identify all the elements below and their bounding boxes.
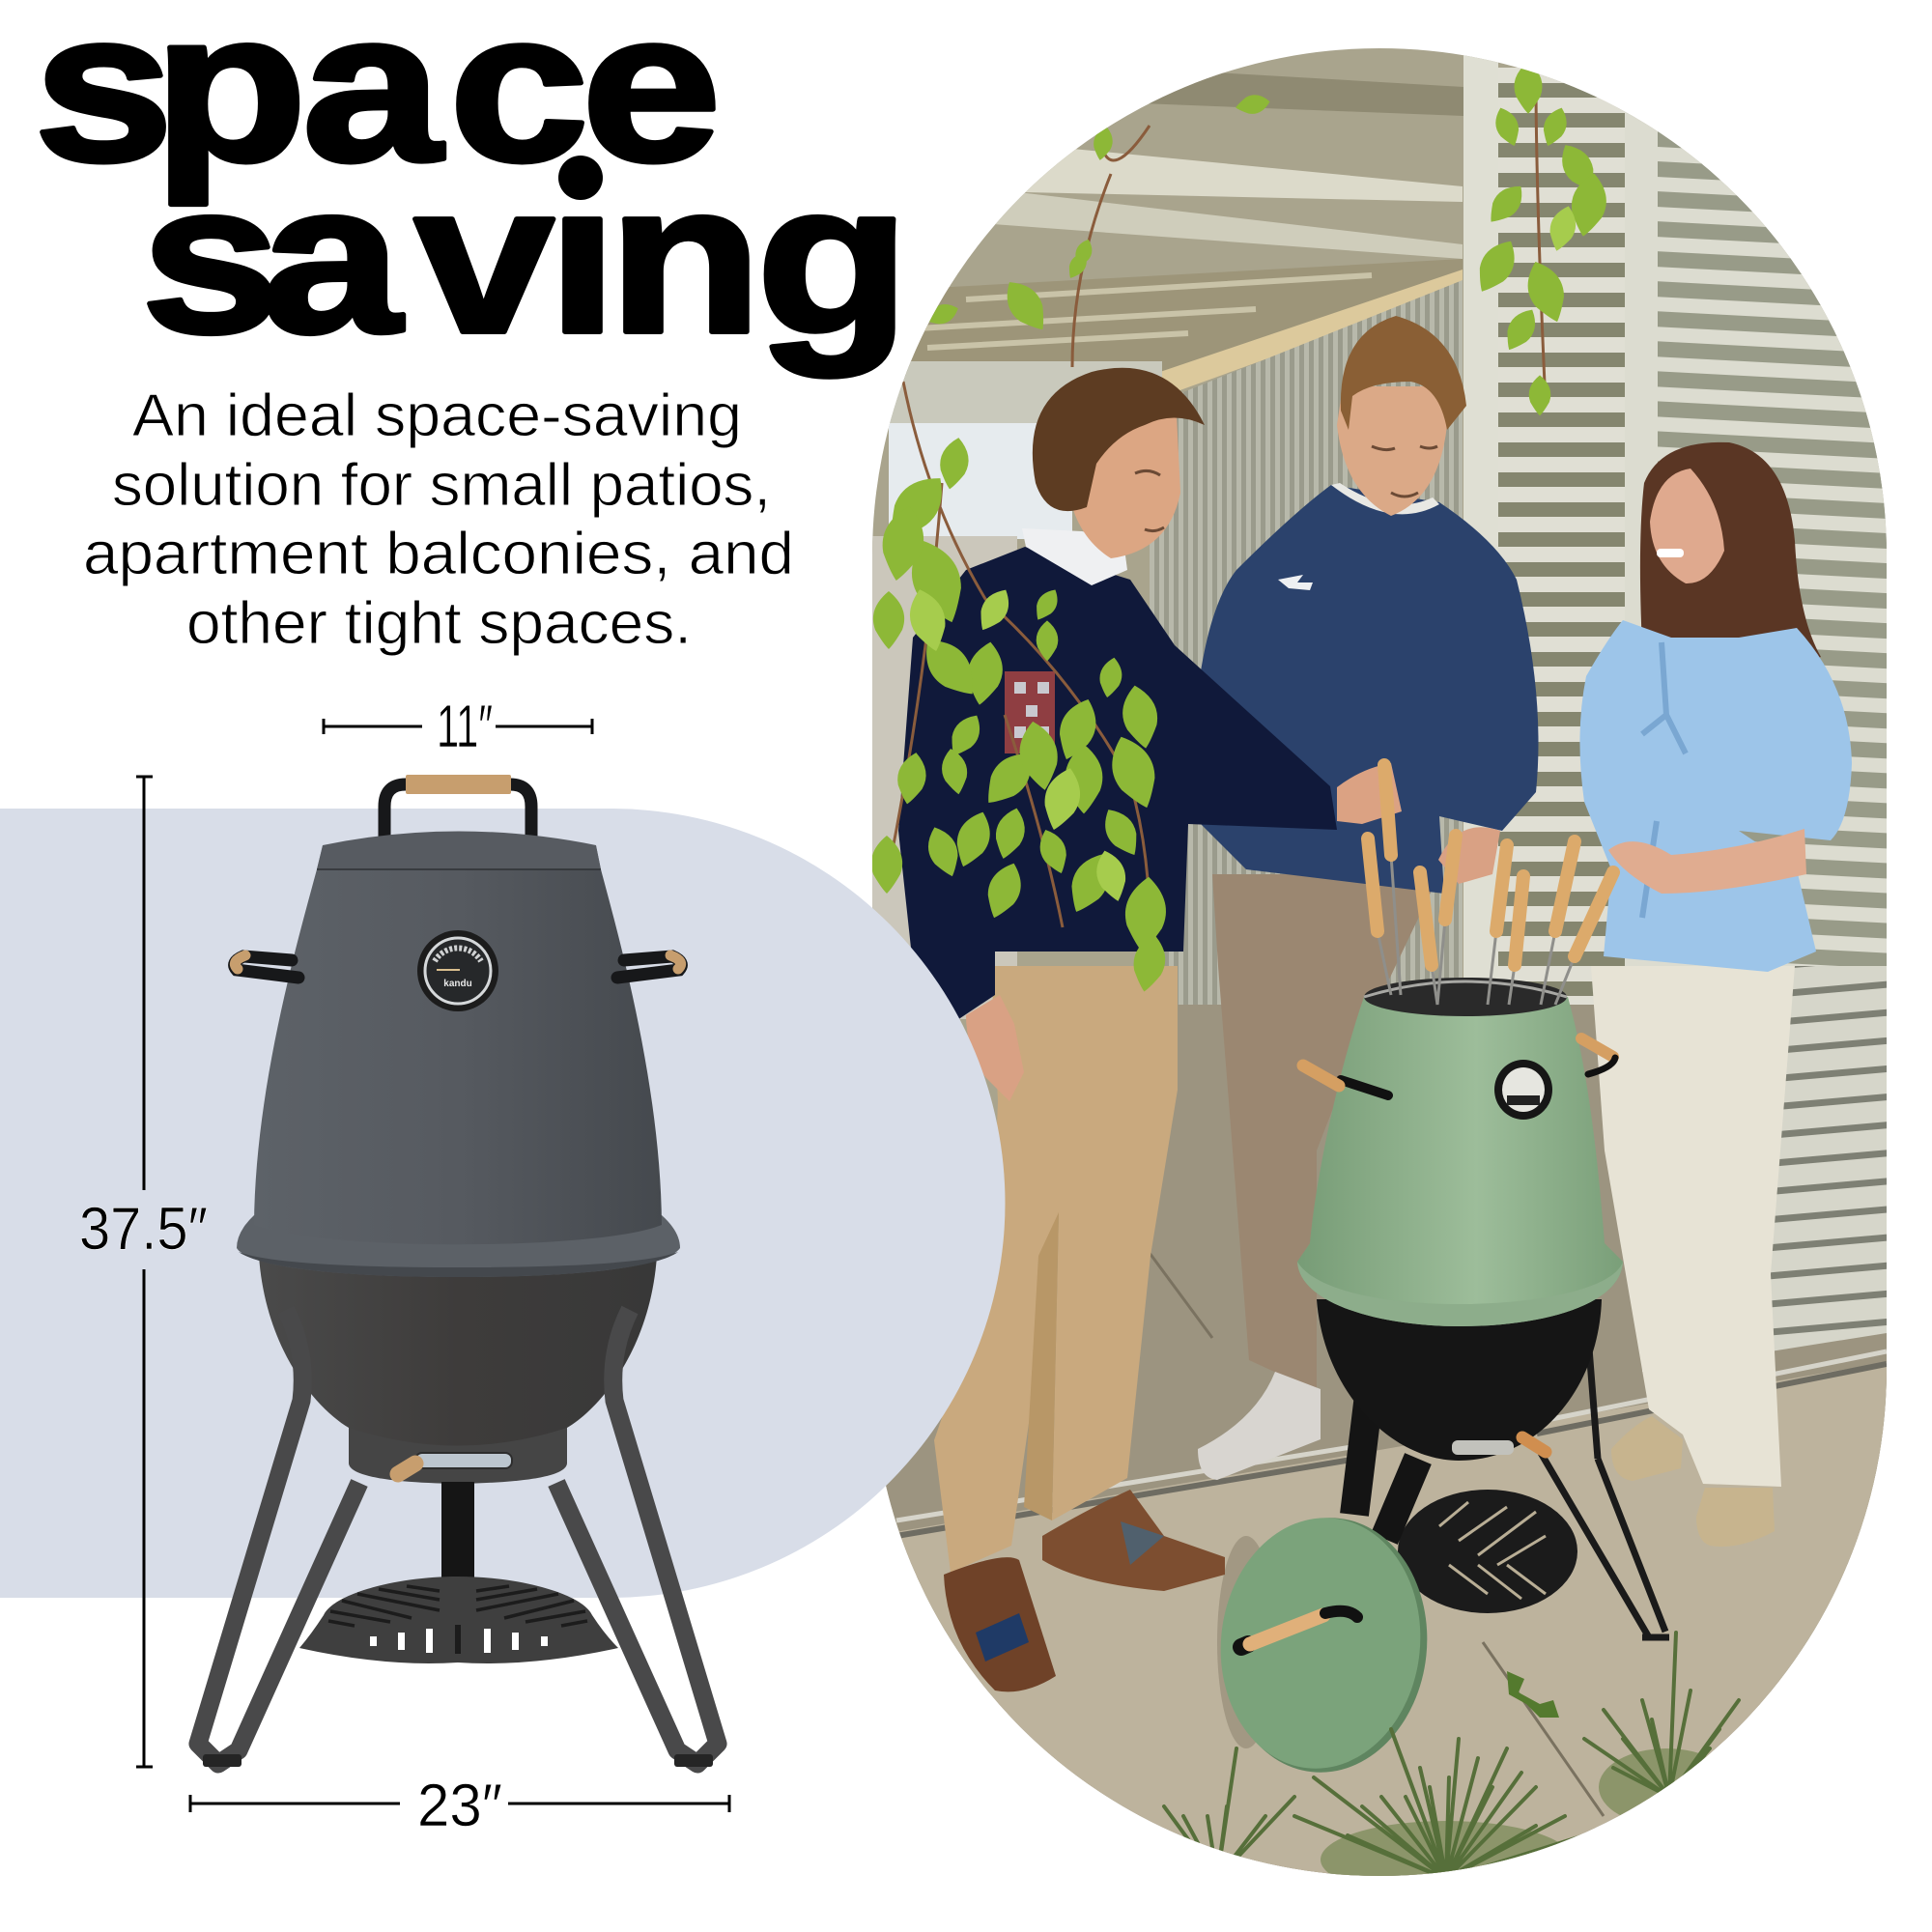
grill gauge [1494,1060,1552,1120]
top handle [384,775,531,838]
dimension: base width 23 inches [190,1773,729,1839]
dimension: top width 11 inches: 11″ [437,694,493,760]
grill legs and shelf [1354,1336,1669,1637]
gauge: kandu [443,979,472,989]
gauge [417,930,498,1011]
concrete ground [872,1005,1887,1876]
person: left man [898,368,1402,1691]
dimension: height 37.5 inches: 37.5″ [79,1196,208,1263]
patio background [872,48,1889,1876]
grill bowl [1317,1299,1602,1461]
dimension: base width 23 inches: 23″ [417,1773,502,1839]
lower shelf [299,1577,618,1663]
blue background panel [0,809,1005,1598]
person: middle man [1179,316,1538,1480]
lower bowl [259,1256,657,1445]
description text: other tight spaces. [186,590,692,657]
photo: three people around green grill on a patio [871,48,1889,1898]
grill lid leaning on legs [1221,1518,1428,1773]
grass tufts [1164,1633,1758,1898]
title: saving [141,140,910,378]
description text [83,383,794,657]
grill body [1297,997,1623,1326]
central post [441,1482,474,1588]
dimension: top width 11 inches [324,694,592,760]
rim [237,1215,680,1277]
lid top [317,831,601,869]
green grill [1297,978,1669,1637]
skewers [1368,765,1613,1005]
grey grill product [198,775,718,1767]
title [34,0,910,378]
ash door [398,1453,512,1474]
main body [254,846,662,1244]
side handles [235,955,681,978]
grill handles [1303,1038,1615,1095]
description text: An ideal space-saving [132,383,742,449]
legs [198,1310,718,1764]
birch branches and leaves [871,62,1611,994]
description text: solution for small patios, [112,452,771,519]
person: woman [1579,442,1852,1547]
dimension: height 37.5 inches [79,777,208,1767]
feet [203,1754,713,1767]
ash collar [349,1415,567,1484]
description text: apartment balconies, and [83,521,794,587]
